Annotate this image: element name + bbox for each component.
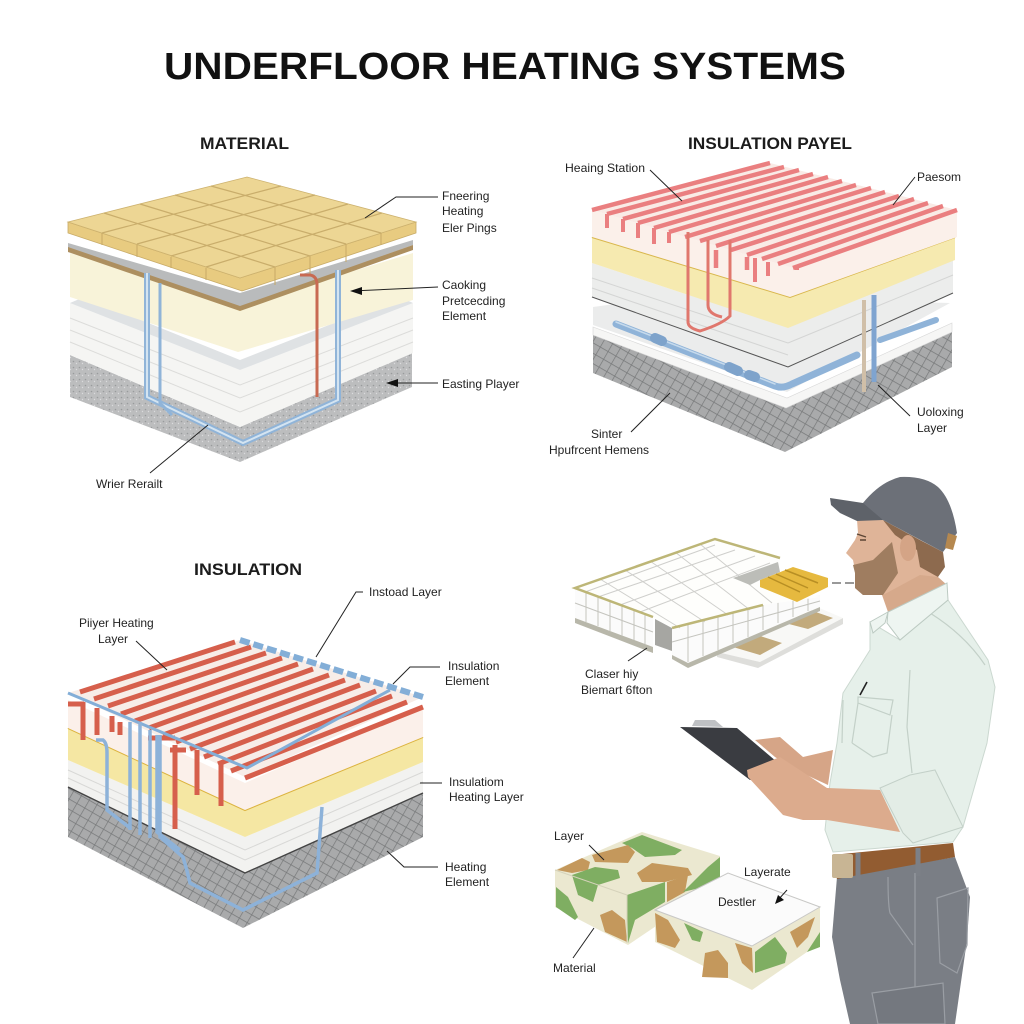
panel: material blocks xyxy=(553,829,820,990)
pale pink layer xyxy=(68,700,423,810)
label: insulation element: Element xyxy=(445,674,490,688)
panel: insulation diagram xyxy=(68,560,524,928)
heading: insulation panel: INSULATION PAYEL xyxy=(688,134,852,153)
neck xyxy=(882,570,947,627)
label: finishing layer: Heating xyxy=(442,204,483,218)
white plate xyxy=(593,323,952,408)
label: destler with arrow: Destler xyxy=(718,895,756,909)
label: underlying layer: Layer xyxy=(917,421,947,435)
cream foam layer xyxy=(70,253,413,352)
heading: insulation: INSULATION xyxy=(194,560,302,579)
label: layerate: Layerate xyxy=(744,865,791,879)
blue horizontal pipes xyxy=(616,320,936,387)
lower plate xyxy=(717,607,843,668)
label: heating element: Heating xyxy=(445,860,486,874)
red heating bars xyxy=(592,163,957,282)
label: material xyxy=(553,928,596,975)
label: underlying layer: Uoloxing xyxy=(917,405,964,419)
label: destler with arrow xyxy=(718,890,787,909)
label: finishing layer: Eler Pings xyxy=(442,221,497,235)
label: element xyxy=(581,648,652,697)
label: finishing layer: Fneering xyxy=(442,189,489,203)
block one xyxy=(555,832,720,945)
label: middle element: Pretcecding xyxy=(442,294,505,308)
tile top layer xyxy=(68,177,416,291)
label: hatched base xyxy=(549,393,670,457)
hatched base xyxy=(68,787,423,928)
label: layer xyxy=(554,829,604,860)
base layer: speckled grey xyxy=(70,353,412,462)
dashed pointer to inspector xyxy=(832,582,855,584)
label: top right: Paesom xyxy=(917,170,961,184)
right side face xyxy=(672,595,820,668)
panel: material diagram xyxy=(68,134,519,491)
far hand and forearm xyxy=(755,737,833,785)
label: base layer xyxy=(386,377,519,391)
white grey layer xyxy=(592,260,953,367)
label: layer: Layer xyxy=(554,829,584,843)
yellow layer xyxy=(68,728,423,837)
label: water pipe xyxy=(96,425,208,491)
label: hatched base: Hpufrcent Hemens xyxy=(549,443,649,457)
rolled sleeve xyxy=(880,770,963,843)
label: player heating layer: Piiyer Heating xyxy=(79,616,154,630)
label: middle element: Caoking xyxy=(442,278,486,292)
cap xyxy=(830,477,957,552)
label: heating station xyxy=(565,161,682,201)
label: insulation heating layer xyxy=(420,775,524,804)
gold block xyxy=(760,567,828,602)
hatched base xyxy=(593,332,952,452)
white insulation layer xyxy=(70,297,413,427)
collar xyxy=(870,583,948,640)
pale pink top layer xyxy=(592,210,957,297)
vertical pipe bundle xyxy=(96,722,322,910)
belt xyxy=(832,843,955,880)
white layer xyxy=(68,760,423,873)
label: top right xyxy=(893,170,961,205)
label: material: Material xyxy=(553,961,596,975)
grid top face xyxy=(575,539,820,628)
shirt torso xyxy=(825,600,995,852)
looped red pipe xyxy=(688,232,730,331)
label: insulation element xyxy=(393,659,499,688)
grey notch xyxy=(655,619,672,651)
block two xyxy=(655,873,820,990)
trousers xyxy=(832,857,970,1024)
label: heating element xyxy=(387,851,490,889)
label: heating element: Element xyxy=(445,875,490,889)
label: middle element xyxy=(350,278,505,323)
pipes xyxy=(147,270,338,443)
label: hatched base: Sinter xyxy=(591,427,622,441)
head and face xyxy=(846,520,945,595)
thin sheet xyxy=(593,295,950,392)
yellow layer xyxy=(592,237,955,328)
label: heating station: Heaing Station xyxy=(565,161,645,175)
left side face xyxy=(575,588,653,653)
label: insulation element: Insulation xyxy=(448,659,499,673)
panel: insulation panel diagram xyxy=(549,134,964,457)
blue manifold lines xyxy=(68,640,423,768)
label: underlying layer xyxy=(878,385,964,435)
label: finishing layer xyxy=(365,189,497,235)
near forearm and hand xyxy=(747,757,900,832)
label: element: Biemart 6fton xyxy=(581,683,652,697)
label: instead layer: Instoad Layer xyxy=(369,585,442,599)
label: insulation heating layer: Heating Layer xyxy=(449,790,524,804)
label: water pipe: Wrier Rerailt xyxy=(96,477,163,491)
label: element: Claser hiy xyxy=(585,667,638,681)
inspector figure xyxy=(680,477,995,1024)
label: player heating layer xyxy=(79,616,167,670)
label: base layer: Easting Player xyxy=(442,377,519,391)
label: insulation heating layer: Insulatiom xyxy=(449,775,504,789)
label: middle element: Element xyxy=(442,309,487,323)
clipboard xyxy=(680,720,790,780)
heading: material: MATERIAL xyxy=(200,134,289,153)
grey cut-out xyxy=(733,562,780,585)
panel: grid panel diagram xyxy=(575,539,855,697)
vertical risers xyxy=(864,295,874,392)
red heating bars xyxy=(68,642,423,829)
grey membrane layer xyxy=(68,240,413,311)
title: UNDERFLOOR HEATING SYSTEMS xyxy=(164,46,846,88)
label: instead layer xyxy=(316,585,442,657)
label: player heating layer: Layer xyxy=(98,632,128,646)
